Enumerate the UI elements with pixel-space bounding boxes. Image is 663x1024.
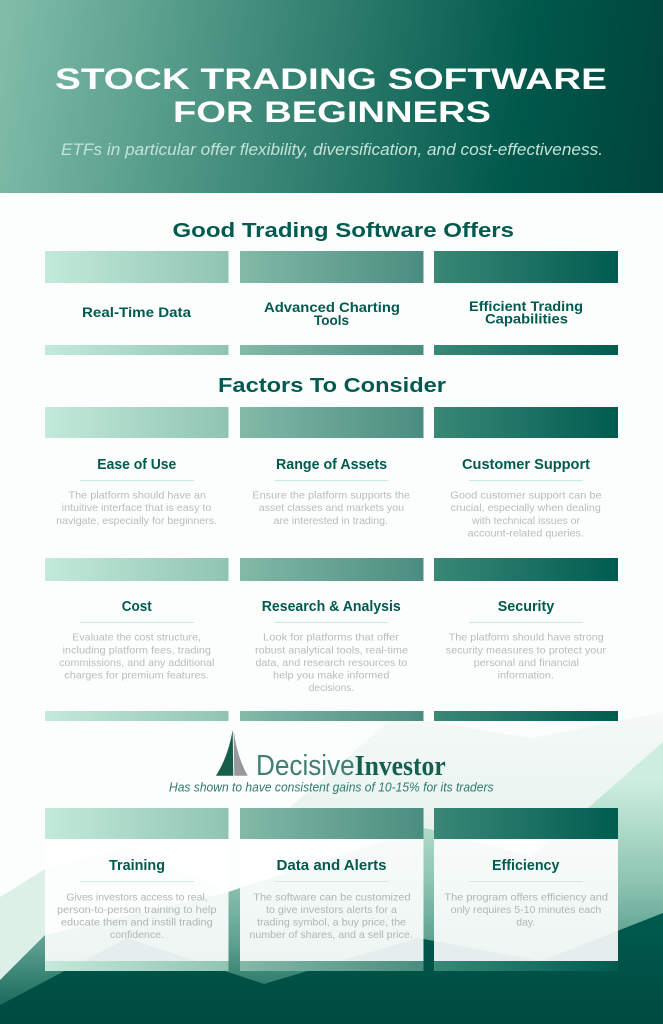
- benefit: training: educate them and instill trading: [61, 918, 213, 928]
- benefit: training: Training: [109, 858, 165, 874]
- logo wordmark: Investor: [355, 750, 446, 782]
- benefit: data and alerts: [240, 808, 424, 971]
- title: FOR BEGINNERS: [173, 96, 491, 129]
- offer: advanced charting tools: Tools: [314, 312, 349, 328]
- factor: cost: [45, 558, 228, 721]
- factor: cost: Evaluate the cost structure,: [72, 633, 201, 644]
- benefit: training: confidence.: [110, 930, 164, 941]
- factor: research and analysis: decisions.: [309, 683, 354, 694]
- heading: factors to consider: Factors To Consider: [218, 374, 446, 397]
- offer: efficient trading capabilities: [434, 251, 618, 355]
- title: STOCK TRADING SOFTWARE: [55, 63, 607, 96]
- benefit: training: [45, 808, 228, 971]
- icon: logo sail right: [234, 730, 248, 776]
- logo: decisive investor: [216, 730, 446, 782]
- factor: ease of use: Ease of Use: [97, 457, 176, 473]
- benefit: efficiency: day.: [516, 918, 535, 928]
- factor: research and analysis: Look for platforms that offer: [263, 633, 400, 644]
- factor: range of assets: asset classes and markets you: [259, 503, 404, 514]
- factor: ease of use: The platform should have an: [68, 490, 206, 502]
- factor: security: The platform should have strong: [449, 633, 604, 644]
- background: dark mountains: [0, 913, 663, 1024]
- factor: customer support: Customer Support: [462, 457, 590, 473]
- factor: ease of use: [45, 407, 228, 527]
- factor: customer support: crucial, especially when dealing: [451, 503, 601, 514]
- factor: security: security measures to protect your: [446, 646, 607, 656]
- benefit: efficiency: [434, 808, 618, 971]
- benefit: data and alerts: The software can be customized: [253, 893, 411, 904]
- factor: security: [434, 558, 618, 721]
- title: [55, 63, 607, 129]
- offer: efficient trading capabilities: Capabilities: [485, 310, 568, 326]
- factor: customer support: Good customer support can be: [450, 490, 602, 502]
- factor: range of assets: [240, 407, 424, 527]
- factor: security: information.: [498, 671, 554, 682]
- factor: range of assets: are interested in trading.: [274, 516, 388, 527]
- factor: research and analysis: data, and research resources to: [255, 658, 407, 669]
- header banner: [0, 0, 663, 193]
- background: green gradient mountains: [0, 742, 663, 1024]
- benefit: efficiency: Efficiency: [492, 858, 559, 874]
- offer: efficient trading capabilities: Efficient Trading: [469, 298, 583, 314]
- offer: real-time data: [45, 251, 228, 355]
- benefit: training: Gives investors access to real,: [66, 893, 208, 904]
- factor: range of assets: Range of Assets: [276, 457, 387, 473]
- factor: customer support: account-related queries.: [468, 528, 584, 540]
- panel: factors: [45, 407, 618, 721]
- heading: good trading software offers: Good Trading Software Offers: [172, 219, 514, 242]
- benefit: data and alerts: trading symbol, a buy price, the: [257, 918, 406, 928]
- benefit: efficiency: The program offers efficiency and: [444, 893, 608, 904]
- factor: customer support: [434, 407, 618, 540]
- benefit: data and alerts: number of shares, and a sell price.: [250, 930, 413, 941]
- background: light mint slope: [0, 848, 228, 985]
- benefit: training: person-to-person training to help: [57, 905, 217, 916]
- offer: advanced charting tools: Advanced Charting: [264, 299, 400, 315]
- factor: research and analysis: robust analytical tools, real-time: [255, 646, 408, 656]
- offer: advanced charting tools: [240, 251, 424, 355]
- benefit: efficiency: only requires 5-10 minutes each: [451, 905, 602, 916]
- factor: security: personal and financial: [474, 658, 579, 669]
- factor: customer support: with technical issues or: [471, 516, 581, 527]
- panel: offers: [45, 251, 618, 355]
- factor: security: Security: [498, 599, 554, 615]
- factor: ease of use: intuitive interface that is easy to: [62, 503, 212, 514]
- factor: research and analysis: [240, 558, 424, 721]
- subtitle: ETFs in particular offer flexibility, diversification, and cost-effectiveness.: [61, 140, 603, 159]
- tagline: Has shown to have consistent gains of 10-15% for its traders: [169, 780, 494, 795]
- factor: cost: commissions, and any additional: [59, 658, 214, 669]
- benefit: data and alerts: to give investors alerts for a: [266, 905, 397, 916]
- factor: research and analysis: Research & Analysis: [262, 599, 401, 615]
- panel: benefits: [45, 808, 618, 971]
- benefit: data and alerts: Data and Alerts: [276, 858, 386, 874]
- factor: ease of use: navigate, especially for beginners.: [56, 516, 217, 527]
- logo wordmark: [256, 750, 446, 782]
- logo wordmark: Decisive: [256, 750, 355, 782]
- offer: real-time data: Real-Time Data: [82, 304, 191, 320]
- icon: logo sail left: [216, 730, 233, 776]
- factor: range of assets: Ensure the platform supports the: [252, 490, 410, 502]
- factor: cost: including platform fees, trading: [63, 646, 211, 656]
- factor: cost: charges for premium features.: [64, 671, 209, 682]
- background: pale mountain: [280, 712, 663, 1024]
- factor: cost: Cost: [122, 599, 152, 615]
- factor: research and analysis: help you make informed: [273, 671, 390, 682]
